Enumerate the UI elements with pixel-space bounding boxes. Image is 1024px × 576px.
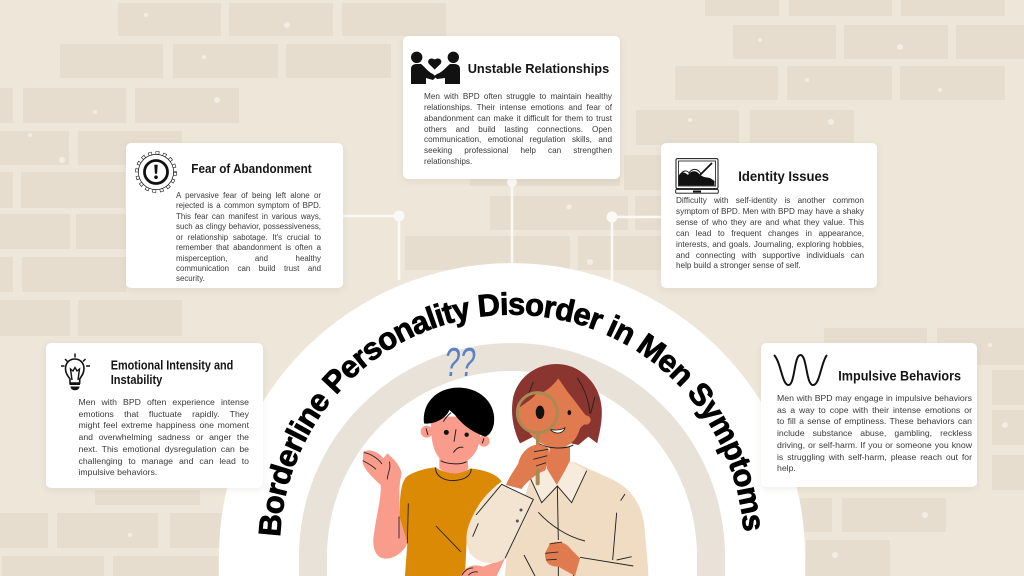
text: identity issues: symptom of BPD. Men with BPD may have a shaky <box>676 207 864 216</box>
text: emotional intensity and instability: and overwhelming sadness or anger the <box>78 432 249 442</box>
text: impulsive behaviors <box>777 393 972 473</box>
text: unstable relationships: communication, emotional regulation skills, and <box>424 135 612 144</box>
text: fear of abandonment: or relationship sabotage. It's crucial to <box>176 233 321 242</box>
text: emotional intensity and instability: challenging to manage and can lead to <box>78 456 249 466</box>
woman <box>466 364 648 576</box>
icon: laptop with painting <box>675 158 719 194</box>
text: emotional intensity and instability: Men with BPD often experience intense <box>78 397 249 407</box>
text: impulsive behaviors: Men with BPD may engage in impulsive behaviors <box>777 393 972 403</box>
heading: emotional intensity and instability <box>111 358 233 387</box>
text: unstable relationships <box>424 92 612 166</box>
text: emotional intensity and instability: next. This emotional dysregulation can be <box>78 444 249 454</box>
text: fear of abandonment: such as clingy behavior, possessiveness, <box>176 222 321 231</box>
text: emotional intensity and instability: impulsive behaviors. <box>78 467 157 477</box>
white outer arch <box>219 263 805 576</box>
text: impulsive behaviors: as a way to cope with their intense emotions or <box>777 405 972 415</box>
text: identity issues: can lead to frequent changes in appearance, <box>676 229 864 238</box>
panel: identity issues <box>661 143 877 288</box>
text: identity issues: and connecting with supportive individuals can <box>676 251 864 260</box>
text: emotional intensity and instability: might feel extreme happiness one moment <box>78 420 249 430</box>
text: identity issues: Difficulty with self-identity is another common <box>676 196 864 205</box>
heading: fear of abandonment: Fear of Abandonment <box>191 161 312 176</box>
text: unstable relationships: others and build lasting connections. Open <box>424 125 612 134</box>
illustration: boy and woman with magnifier <box>362 340 648 576</box>
connector: unstable relationships <box>507 177 517 270</box>
text: unstable relationships: abandonment can make it difficult for them to trust <box>424 114 612 123</box>
text: fear of abandonment: rejected is a common symptom of BPD. <box>176 201 321 210</box>
heading: impulsive behaviors: Impulsive Behaviors <box>838 368 961 384</box>
panel: unstable relationships <box>403 36 620 179</box>
heading: unstable relationships: Unstable Relationships <box>468 61 609 76</box>
connector: identity issues <box>606 212 661 285</box>
text: impulsive behaviors: to fill a sense of emptiness. These behaviors can <box>777 416 972 426</box>
panel: fear of abandonment <box>126 143 343 288</box>
text: fear of abandonment: misperception, and healthy <box>176 254 321 263</box>
text: impulsive behaviors: include substance abuse, gambling, reckless <box>777 428 972 438</box>
panel: emotional intensity and instability <box>46 343 263 488</box>
text: unstable relationships: Men with BPD often struggle to maintain healthy <box>424 92 612 101</box>
boy <box>363 388 505 576</box>
text: fear of abandonment: remember that abandonment is often a <box>176 243 321 252</box>
text: fear of abandonment: communication can build trust and <box>176 264 321 273</box>
connector: fear of abandonment <box>343 210 404 280</box>
icon: two people with heart <box>411 52 460 84</box>
text: impulsive behaviors: help. <box>777 463 796 473</box>
text: identity issues <box>676 196 864 270</box>
icon: wave line <box>773 354 828 386</box>
icon: gear with exclamation <box>135 151 177 193</box>
text: impulsive behaviors: is struggling with self-harm, please reach out for <box>777 452 972 462</box>
heading: emotional intensity and instability: Instability <box>111 373 162 387</box>
text: emotional intensity and instability <box>78 397 249 477</box>
text: identity issues: help build a stronger sense of self. <box>676 261 801 270</box>
text: identity issues: interests, and goals. Journaling, exploring hobbies, <box>676 240 864 249</box>
text: unstable relationships: relationships. <box>424 157 472 166</box>
icon: light bulb <box>61 354 90 390</box>
panel: impulsive behaviors <box>761 343 977 487</box>
heading: identity issues: Identity Issues <box>738 169 829 184</box>
text: fear of abandonment: This fear can manifest in various ways, <box>176 212 321 221</box>
question marks: ?? <box>442 340 478 385</box>
grey ring <box>299 343 725 576</box>
text: unstable relationships: relationships. Their intense emotions and fear of <box>424 103 612 112</box>
text: identity issues: sense of who they are and what they value. This <box>676 218 864 227</box>
text: fear of abandonment <box>176 191 321 283</box>
text: unstable relationships: seeking professional help can strengthen <box>424 146 612 155</box>
text: fear of abandonment: security. <box>176 274 205 283</box>
text: fear of abandonment: A pervasive fear of being left alone or <box>176 191 321 200</box>
title: curved heading: Borderline Personality Disorder in Men Symptoms <box>258 292 760 536</box>
heading: emotional intensity and instability: Emotional Intensity and <box>111 358 233 372</box>
text: impulsive behaviors: driving, or self-harm. If you or someone you know <box>777 440 972 450</box>
text: emotional intensity and instability: emotions that fluctuate rapidly. They <box>78 409 249 419</box>
